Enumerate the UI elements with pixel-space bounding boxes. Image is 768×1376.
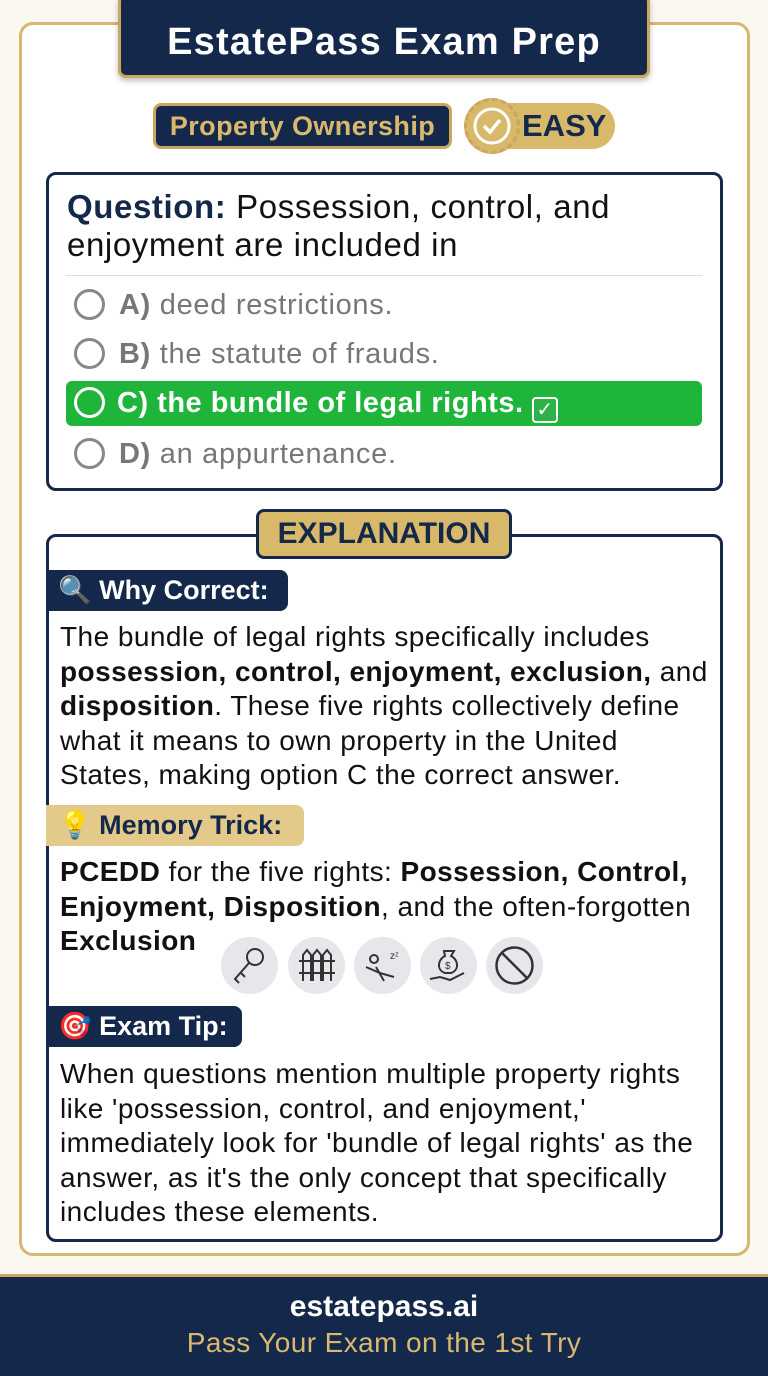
why correct label: 🔍 Why Correct: xyxy=(58,575,269,605)
icon: money bag xyxy=(420,937,477,994)
footer xyxy=(0,1274,768,1376)
memory trick label: 💡 Memory Trick: xyxy=(58,810,282,840)
exam tip label xyxy=(46,1006,242,1047)
footer site: estatepass.ai xyxy=(290,1290,478,1323)
icon: fence xyxy=(288,937,345,994)
icon: prohibited xyxy=(486,937,543,994)
icon: relaxing xyxy=(354,937,411,994)
option C correct xyxy=(66,381,702,426)
option A: A) deed restrictions. xyxy=(119,289,393,321)
title banner: EstatePass Exam Prep xyxy=(167,21,601,63)
explanation card xyxy=(46,534,723,1242)
exam tip text: When questions mention multiple property rights like 'possession, control, and enjoyment,' immediately look for 'bundle of legal rights' as the answer, as it's the only concept that specifically includes these elements. xyxy=(60,1058,693,1227)
category badge: Property Ownership xyxy=(170,111,435,141)
why correct label xyxy=(46,570,288,611)
category badge xyxy=(153,103,452,149)
question text: Question: Possession, control, and enjoyment are included in xyxy=(67,188,610,263)
icon: money bag: $ xyxy=(445,961,451,972)
icons row xyxy=(221,937,543,994)
explanation heading xyxy=(256,509,512,559)
difficulty badge: EASY xyxy=(522,108,606,143)
why correct text: The bundle of legal rights specifically includes possession, control, enjoyment, exclusion, and disposition. These five rights collectively define what it means to own property in the United States, making option C the correct answer. xyxy=(60,621,708,790)
option C correct: C) the bundle of legal rights. xyxy=(117,387,524,419)
option C correct: ✓ xyxy=(536,399,554,421)
title banner xyxy=(118,0,650,78)
icon: relaxing: zᶻ xyxy=(390,951,399,962)
difficulty badge xyxy=(470,103,615,149)
explanation heading: EXPLANATION xyxy=(278,517,490,550)
memory trick text: PCEDD for the five rights: Possession, Control, Enjoyment, Disposition, and the often-forgotten Exclusion xyxy=(60,856,691,956)
icon: seal check xyxy=(464,98,520,154)
footer tagline: Pass Your Exam on the 1st Try xyxy=(187,1327,581,1358)
option B: B) the statute of frauds. xyxy=(119,338,440,370)
option D: D) an appurtenance. xyxy=(119,438,397,470)
icon: key xyxy=(221,937,278,994)
exam tip label: 🎯 Exam Tip: xyxy=(58,1011,228,1041)
question card xyxy=(46,172,723,491)
memory trick label xyxy=(46,805,304,846)
